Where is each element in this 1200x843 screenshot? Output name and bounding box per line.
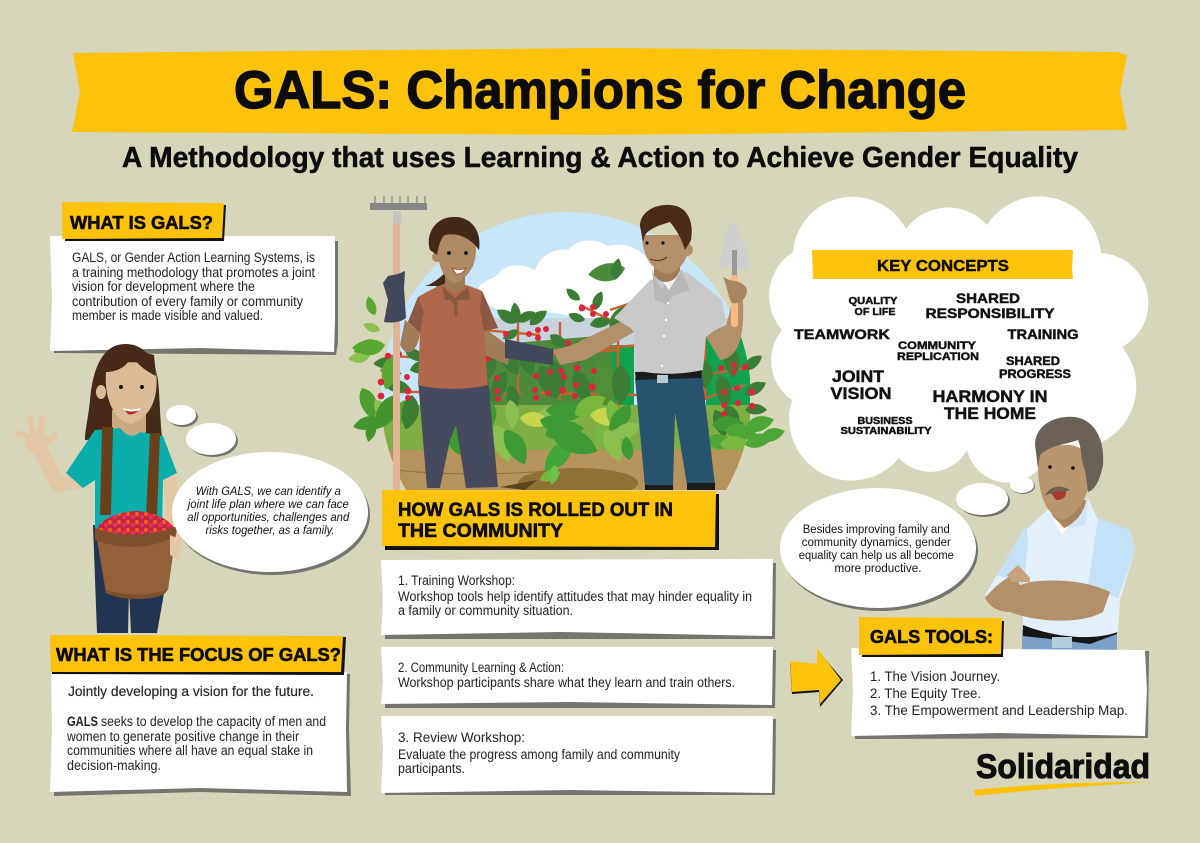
trowel [718, 220, 750, 270]
thought bubble: man [780, 477, 1035, 611]
text: what is GALS: vision for development where the [72, 279, 255, 294]
panel: step 1: 1. Training Workshop: [398, 573, 515, 588]
panel: what is GALS [50, 202, 338, 355]
neck and face [112, 410, 146, 438]
straps [100, 427, 160, 515]
text: what is GALS: contribution of every family or community [72, 294, 303, 309]
heading: focus of GALS: WHAT IS THE FOCUS OF GALS? [56, 645, 341, 665]
heading: GALS tools [859, 617, 1004, 657]
illustration: woman with coffee basket [17, 344, 181, 633]
shirt [985, 498, 1135, 637]
other arm [163, 476, 181, 550]
panel: step 3: Evaluate the progress among family and community [398, 747, 680, 762]
left leaves [348, 296, 420, 442]
illustration: man with folded arms [985, 417, 1135, 650]
panel: focus of GALS [50, 635, 351, 796]
folded arms [985, 575, 1110, 621]
quote: woman: all opportunities, challenges and [187, 510, 350, 524]
head [654, 267, 680, 282]
clouds [478, 240, 657, 318]
quote: woman: risks together, as a family. [206, 523, 334, 537]
quote: man: more productive. [834, 561, 922, 575]
key concepts bar: KEY CONCEPTS [877, 258, 1009, 275]
coffee plants [475, 257, 768, 439]
neck [1052, 495, 1086, 528]
field [380, 405, 760, 455]
concept words: THE HOME [944, 405, 1036, 423]
concept words: BUSINESS [858, 416, 913, 427]
title banner [72, 48, 1127, 135]
trellis [390, 300, 745, 415]
teal shirt [66, 428, 177, 530]
concept words: RESPONSIBILITY [926, 306, 1054, 321]
quote: woman: With GALS, we can identify a [196, 484, 341, 498]
illustration: farmers in coffee field [348, 196, 787, 500]
text: what is GALS: member is made visible and valued. [72, 308, 263, 323]
text: focus of GALS: decision-making. [67, 758, 161, 773]
quote: man: community dynamics, gender [802, 535, 951, 549]
arrow [790, 648, 843, 707]
head [1038, 445, 1091, 520]
panel: step 3: participants. [398, 761, 465, 776]
coffee berries [378, 304, 755, 417]
berries [97, 511, 175, 538]
text: GALS tools: 3. The Empowerment and Leadership Map. [870, 702, 1128, 718]
right arm [705, 300, 743, 360]
text: what is GALS: a training methodology that promotes a joint [72, 265, 315, 280]
title: GALS: Champions for Change [234, 61, 966, 120]
panel: step 3: 3. Review Workshop: [398, 730, 525, 745]
panel: step 3 [381, 716, 776, 795]
thought bubble: woman [166, 405, 370, 575]
gloves [383, 271, 406, 323]
foreground leaves [445, 389, 787, 485]
text: focus of GALS: seeks to develop the capacity of men and [101, 714, 326, 729]
concept words: VISION [830, 385, 892, 403]
text: GALS tools: 2. The Equity Tree. [870, 685, 981, 701]
neck and head [445, 276, 465, 292]
concept words [794, 291, 1079, 437]
jeans [1022, 630, 1117, 650]
concept words: QUALITY [848, 295, 898, 307]
concept words: SHARED [956, 291, 1020, 306]
concept words: SHARED [1006, 356, 1060, 368]
panel: step 2 [381, 647, 776, 708]
sky circle [380, 210, 760, 500]
arms [400, 320, 420, 352]
text: focus of GALS: GALS [67, 714, 98, 729]
quote: man: equality can help us all become [799, 548, 954, 562]
pants [93, 525, 176, 633]
concept words: REPLICATION [897, 351, 979, 363]
belt [635, 370, 702, 380]
dark foliage backdrop [488, 335, 615, 410]
bright green backdrop [607, 335, 750, 425]
left arm shaking hands [553, 320, 634, 365]
waving arm [17, 417, 82, 485]
key concepts bar [812, 250, 1073, 279]
basket [95, 526, 177, 598]
quote: woman: joint life plan where we can face [186, 497, 349, 511]
concept words: TEAMWORK [794, 326, 890, 342]
concept words: TRAINING [1008, 326, 1079, 342]
heading: how GALS is rolled out: THE COMMUNITY [398, 521, 563, 542]
concept words: COMMUNITY [898, 340, 977, 352]
panel: step 1 [381, 559, 776, 639]
panel: step 2: Workshop participants share what they learn and train others. [398, 675, 735, 690]
heading: how GALS is rolled out: HOW GALS IS ROLLED OUT IN [398, 500, 673, 521]
quote: man: Besides improving family and [803, 522, 950, 536]
heading: what is GALS: WHAT IS GALS? [70, 213, 213, 233]
text: what is GALS: GALS, or Gender Action Learning Systems, is [72, 250, 315, 265]
panel: step 1: a family or community situation. [398, 603, 573, 618]
concept words: JOINT [832, 368, 884, 386]
concept words: OF LIFE [854, 306, 896, 318]
subtitle: A Methodology that uses Learning & Action to Achieve Gender Equality [122, 142, 1078, 174]
rake [370, 196, 427, 490]
logo: Solidaridad: Solidaridad [976, 748, 1150, 786]
panel: step 1: Workshop tools help identify attitudes that may hinder equality in [398, 589, 752, 604]
text: focus of GALS: communities where all have an equal stake in [67, 743, 313, 758]
shirt [408, 282, 498, 389]
shirt [614, 272, 726, 374]
belt [1023, 625, 1117, 644]
panel: GALS tools [851, 617, 1149, 739]
heading: GALS tools: GALS TOOLS: [870, 627, 993, 647]
text: focus of GALS: Jointly developing a vision for the future. [68, 684, 314, 699]
heading: what is GALS [62, 202, 226, 241]
farmer woman [383, 217, 553, 488]
panel: step 2: 2. Community Learning & Action: [398, 660, 564, 675]
heading: how GALS is rolled out [382, 490, 719, 550]
farmer man [553, 205, 750, 490]
trousers [418, 378, 498, 488]
trousers [635, 375, 715, 487]
heading: focus of GALS [50, 635, 346, 675]
concept words: HARMONY IN [932, 388, 1048, 406]
text: focus of GALS [66, 684, 330, 773]
concept words: SUSTAINABILITY [840, 426, 932, 437]
text: focus of GALS: women to generate positive change in their [66, 729, 299, 744]
thought cloud: key concepts [769, 196, 1148, 483]
hair back [85, 344, 162, 440]
text: GALS tools: 1. The Vision Journey. [870, 668, 1000, 684]
concept words: PROGRESS [999, 369, 1071, 381]
